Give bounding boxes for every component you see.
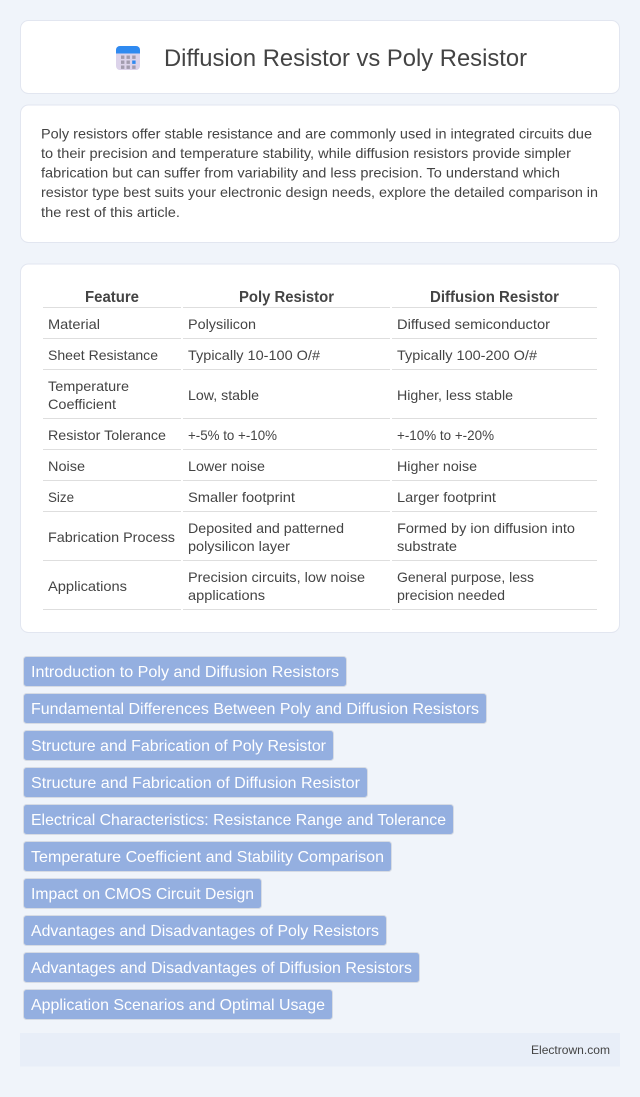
table header row: Feature — [85, 289, 139, 306]
text block: introduction: resistor type best suits your electronic design needs, explore the detailed comparison in — [41, 184, 598, 200]
link pill: diffusion pros and cons — [24, 952, 420, 982]
title: Diffusion Resistor vs Poly Resistor — [164, 45, 527, 72]
table header row — [43, 289, 597, 308]
table row: applications: applications — [188, 587, 265, 603]
link pill: poly structure: Structure and Fabrication of Poly Resistor — [31, 738, 327, 755]
table row: sheet resistance: Typically 100-200 O/# — [397, 347, 537, 363]
table row: resistor tolerance: Resistor Tolerance — [48, 427, 166, 443]
link pill: electrical characteristics — [24, 804, 454, 834]
table row: applications: Applications — [48, 578, 127, 594]
link pill: introduction — [24, 656, 346, 686]
table row: fabrication process: polysilicon layer — [188, 538, 290, 554]
link pill: temperature coefficient — [24, 842, 392, 872]
table row: noise: Higher noise — [397, 458, 477, 474]
link pill: fundamental differences — [24, 694, 486, 724]
table row: size: Larger footprint — [397, 489, 496, 505]
table row: size: Size — [48, 489, 74, 505]
text block: introduction: Poly resistors offer stable resistance and are commonly used in integrated circuits due — [41, 126, 592, 142]
table row: resistor tolerance: +-5% to +-10% — [188, 427, 277, 443]
link pill: introduction: Introduction to Poly and Diffusion Resistors — [31, 664, 339, 681]
link pill: diffusion pros and cons: Advantages and Disadvantages of Diffusion Resistors — [31, 960, 412, 977]
text block: introduction: the rest of this article. — [41, 204, 180, 220]
table row: fabrication process: substrate — [397, 538, 457, 554]
table row: size — [43, 489, 597, 512]
panel: comparison table — [20, 264, 620, 632]
table header row: Diffusion Resistor — [430, 289, 559, 306]
panel: introduction text — [20, 105, 620, 242]
table row: size: Smaller footprint — [188, 489, 295, 505]
table row: noise — [43, 458, 597, 481]
footer — [20, 1033, 620, 1066]
icon: calendar grid — [116, 46, 140, 70]
link pill: electrical characteristics: Electrical Characteristics: Resistance Range and Tolerance — [31, 812, 446, 829]
panel: header — [20, 20, 620, 94]
table row: temperature coefficient: Low, stable — [188, 387, 259, 403]
table row: sheet resistance — [43, 347, 597, 370]
link pill: application scenarios — [24, 990, 332, 1020]
table row: applications — [43, 569, 597, 610]
table row: temperature coefficient: Higher, less stable — [397, 387, 513, 403]
table row: fabrication process — [43, 520, 597, 561]
table row: resistor tolerance: +-10% to +-20% — [397, 427, 494, 443]
link pill: fundamental differences: Fundamental Differences Between Poly and Diffusion Resistors — [31, 701, 479, 718]
table row: applications: General purpose, less — [397, 569, 534, 585]
link pill: diffusion structure — [24, 768, 368, 798]
table row: applications: precision needed — [397, 587, 505, 603]
table row: temperature coefficient: Coefficient — [48, 396, 116, 412]
table row: fabrication process: Deposited and patterned — [188, 520, 344, 536]
table row: noise: Lower noise — [188, 458, 265, 474]
table row: sheet resistance: Typically 10-100 O/# — [188, 347, 320, 363]
table header row: Poly Resistor — [239, 289, 334, 306]
table row: temperature coefficient — [43, 378, 597, 419]
link pill: poly pros and cons: Advantages and Disadvantages of Poly Resistors — [31, 923, 379, 940]
table row: material: Polysilicon — [188, 316, 256, 332]
link pill: cmos impact — [24, 878, 262, 908]
table row: material: Diffused semiconductor — [397, 316, 550, 332]
table row: resistor tolerance — [43, 427, 597, 450]
footer source text: Electrown.com — [531, 1043, 610, 1057]
link pill: poly pros and cons — [24, 916, 386, 946]
table row: temperature coefficient: Temperature — [48, 378, 129, 394]
table row: fabrication process: Formed by ion diffusion into — [397, 520, 575, 536]
table row: fabrication process: Fabrication Process — [48, 529, 175, 545]
table row: applications: Precision circuits, low noise — [188, 569, 365, 585]
link pill: cmos impact: Impact on CMOS Circuit Design — [31, 886, 254, 903]
table row: material: Material — [48, 316, 100, 332]
table row: noise: Noise — [48, 458, 85, 474]
text block: introduction: to their precision and temperature stability, while diffusion resistors provide simpler — [41, 145, 571, 161]
link pill: application scenarios: Application Scenarios and Optimal Usage — [31, 997, 325, 1014]
table row: material — [43, 316, 597, 339]
text block: introduction: fabrication but can suffer from variability and less precision. To understand which — [41, 165, 560, 181]
link pill: diffusion structure: Structure and Fabrication of Diffusion Resistor — [31, 775, 361, 792]
table row: sheet resistance: Sheet Resistance — [48, 347, 158, 363]
link pill: poly structure — [24, 730, 334, 760]
text block: introduction — [41, 126, 598, 220]
link pill: temperature coefficient: Temperature Coefficient and Stability Comparison — [31, 849, 384, 866]
